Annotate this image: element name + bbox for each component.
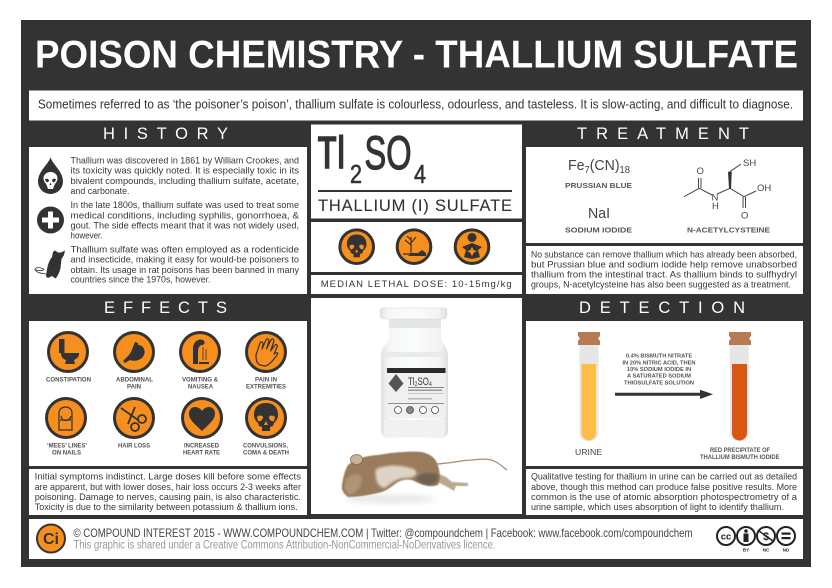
icons: creative commons: NC — [763, 548, 770, 552]
text: history paragraphs: countries since the 1970s, however. — [70, 275, 210, 286]
icons: creative commons: BY — [743, 548, 749, 552]
formula Tl2SO4: Tl — [318, 126, 346, 179]
arrow — [615, 390, 713, 399]
N-acetylcysteine structure: SH — [743, 158, 756, 169]
label: red precipitate: RED PRECIPITATE OF — [710, 448, 770, 454]
arrow label: reagents: 0.4% BISMUTH NITRATE — [626, 354, 692, 360]
Prussian blue formula: 7 — [584, 165, 590, 176]
text: history paragraphs — [70, 156, 300, 286]
heading: treatment: TREATMENT — [577, 125, 749, 143]
logo: compound interest: Ci — [43, 531, 59, 548]
panel: treatment text: thallium from the intestinal tract. As thallium binds to sulfhydryl — [531, 270, 797, 281]
label: increased heart rate: INCREASED — [184, 443, 219, 450]
panel: median lethal dose: MEDIAN LETHAL DOSE: 10-15mg/kg — [321, 279, 512, 290]
text: history paragraphs: gout. The side effects meant that it was not widely used, — [70, 221, 299, 232]
arrow label: reagents: IN 20% NITRIC ACID, THEN — [622, 360, 696, 366]
compound name: THALLIUM (I) SULFATE — [318, 197, 512, 215]
panel: effects text: poisoning. Damage to nerves, causing pain, is also characteristic. — [35, 492, 301, 503]
icons: creative commons: $ — [763, 531, 769, 543]
Prussian blue formula: Fe — [568, 157, 586, 174]
icon: health hazard — [455, 230, 489, 264]
panel: effects text — [29, 469, 307, 515]
arrow label: reagents: 10% SODIUM IODIDE IN — [627, 367, 691, 373]
icon: hair loss scissors — [114, 398, 154, 438]
arrow label: reagents — [622, 354, 696, 386]
panel: photo — [311, 298, 522, 514]
text: history paragraphs: medical conditions, including syphilis, gonorrhoea, & — [70, 210, 300, 221]
label: pain in extremities — [246, 377, 286, 391]
icon: urine test tube — [578, 332, 600, 442]
Prussian blue formula: (CN) — [590, 157, 620, 174]
panel: formula — [311, 124, 522, 218]
N-acetylcysteine structure — [684, 158, 771, 222]
icon: toxic skull — [340, 230, 374, 264]
panel: effects text: are apparent, but with lower doses, hair loss occurs 2-3 weeks after — [35, 482, 301, 493]
icons: creative commons: ND — [783, 548, 790, 552]
label: convulsions, coma and death: CONVULSIONS, — [243, 443, 288, 450]
icon: environmental hazard — [397, 230, 431, 264]
icon: constipation — [48, 332, 88, 372]
icon: medical cross — [37, 206, 64, 234]
heading: detection: DETECTION — [579, 299, 745, 317]
panel: detection text: common is the use of atomic absorption photospectrometry of a — [531, 492, 798, 503]
icon: poison drop — [38, 157, 63, 194]
text: history paragraphs: Thallium sulfate was often employed as a rodenticide — [70, 245, 299, 256]
label: red precipitate — [700, 448, 780, 461]
text: history paragraphs: obtain. Its usage in rat poisons has been banned in many — [70, 265, 299, 276]
label: increased heart rate: HEART RATE — [183, 450, 220, 456]
label: Mees' lines on nails: ON NAILS — [52, 450, 81, 456]
N-acetylcysteine structure: OH — [757, 183, 771, 194]
label: vomiting and nausea: NAUSEA — [188, 384, 213, 391]
label: Prussian blue: PRUSSIAN BLUE — [565, 181, 632, 190]
text: history paragraphs: and insecticide, making it easy for would-be poisoners to — [70, 255, 299, 266]
panel: hazard icons — [311, 222, 522, 272]
panel: treatment text: groups, N-acetylcysteine has also been suggested as a treatment. — [531, 280, 791, 291]
label: N-acetylcysteine: N-ACETYLCYSTEINE — [687, 226, 770, 235]
photo: glass jar — [380, 308, 448, 438]
icons: creative commons — [717, 527, 795, 552]
label: constipation: CONSTIPATION — [46, 377, 91, 384]
formula Tl2SO4: SO — [364, 126, 412, 179]
label: convulsions, coma and death: COMA & DEATH — [243, 450, 289, 456]
icons: creative commons: cc — [721, 532, 731, 542]
panel: intro: Sometimes referred to as ‘the poisoner’s poison’, thallium sulfate is colourless, odourless, and tasteless. It is slow-acting, and difficult to diagnose. — [38, 98, 793, 112]
label: urine: URINE — [575, 447, 602, 457]
panel: effects text: Toxicity is due to the similarity between potassium & thallium ions. — [35, 502, 298, 513]
arrow label: reagents: A SATURATED SODIUM — [627, 374, 691, 380]
label: hair loss: HAIR LOSS — [118, 443, 150, 450]
label: sodium iodide: SODIUM IODIDE — [565, 226, 632, 235]
panel: footer — [29, 519, 803, 559]
icon: abdominal pain — [114, 332, 154, 372]
heading: effects: EFFECTS — [104, 299, 227, 317]
panel: effects icons — [29, 321, 307, 466]
label: abdominal pain — [116, 377, 153, 391]
icon: pain in extremities — [246, 332, 286, 372]
arrow label: reagents: THIOSULFATE SOLUTION — [624, 380, 694, 386]
text: history paragraphs: its toxicity was quickly noted. It is especially toxic in its — [70, 166, 299, 177]
icon: vomiting — [180, 332, 220, 372]
text: history paragraphs: bivalent compounds, including thallium sulfate, acetate, — [70, 176, 299, 187]
credit line: © COMPOUND INTEREST 2015 - WWW.COMPOUNDCHEM.COM | Twitter: @compoundchem | Facebook: www.facebook.com/compoundchem — [74, 526, 693, 540]
text: history paragraphs: Thallium was discovered in 1861 by William Crookes, and — [70, 156, 299, 166]
label: abdominal pain: PAIN — [127, 384, 141, 391]
panel: effects text: Initial symptoms indistinct. Large doses kill before some effects — [35, 472, 301, 483]
label: increased heart rate — [183, 443, 220, 456]
text: history paragraphs: and carbonate. — [70, 186, 130, 197]
heading: history: HISTORY — [103, 125, 228, 143]
sodium iodide formula: NaI — [588, 205, 610, 222]
panel: detection diagram — [526, 321, 803, 466]
label: pain in extremities: EXTREMITIES — [246, 384, 286, 391]
icon: Mees' lines on nails — [46, 398, 86, 438]
label: Mees' lines on nails: ‘MEES’ LINES’ — [47, 443, 87, 450]
icon: skull — [246, 398, 286, 438]
panel: detection text: above, though this method can produce false positive results. More — [531, 482, 797, 493]
text: history paragraphs: In the late 1800s, thallium sulfate was used to treat some — [70, 200, 299, 211]
formula Tl2SO4 — [318, 126, 426, 189]
icon: heart — [182, 398, 222, 438]
panel: intro — [29, 90, 803, 120]
N-acetylcysteine structure: O — [696, 166, 704, 177]
label: abdominal pain: ABDOMINAL — [116, 377, 153, 384]
panel: history — [29, 147, 307, 294]
panel: treatment text: No substance can remove thallium which has already been absorbed, — [531, 249, 797, 260]
label: vomiting and nausea — [182, 377, 218, 391]
jar label: Tl₂SO₄ — [408, 376, 432, 388]
label: convulsions, coma and death — [243, 443, 289, 456]
panel: treatment text: but Prussian blue and sodium iodide help remove unabsorbed — [531, 260, 797, 271]
panel: treatment text — [526, 246, 803, 294]
panel: detection text: Qualitative testing for thallium in urine can be carried out as detailed — [531, 472, 797, 483]
panel: treatment compounds — [526, 147, 803, 243]
title: POISON CHEMISTRY - THALLIUM SULFATE — [35, 34, 798, 76]
icon: precipitate test tube — [729, 332, 751, 442]
formula Tl2SO4: 2 — [350, 159, 362, 189]
label: Mees' lines on nails — [47, 443, 87, 456]
logo: compound interest — [37, 524, 65, 552]
label: vomiting and nausea: VOMITING & — [182, 377, 218, 384]
Prussian blue formula: 18 — [620, 165, 630, 176]
N-acetylcysteine structure: N — [712, 192, 718, 204]
icon: rat — [35, 250, 65, 278]
N-acetylcysteine structure: O — [741, 210, 748, 222]
photo: dead mouse — [342, 452, 507, 503]
panel: detection text — [526, 469, 803, 515]
licence line: This graphic is shared under a Creative Commons Attribution-NonCommercial-NoDerivatives licence. — [74, 540, 496, 552]
label: red precipitate: THALLIUM BISMUTH IODIDE — [700, 455, 780, 461]
panel: detection text: urine sample, which uses absorption of light to identify thallium. — [531, 502, 784, 513]
text: history paragraphs: however. — [70, 230, 102, 242]
label: pain in extremities: PAIN IN — [255, 377, 277, 384]
panel: median lethal dose — [311, 275, 522, 294]
N-acetylcysteine structure: H — [712, 201, 719, 212]
formula Tl2SO4: 4 — [414, 159, 426, 189]
